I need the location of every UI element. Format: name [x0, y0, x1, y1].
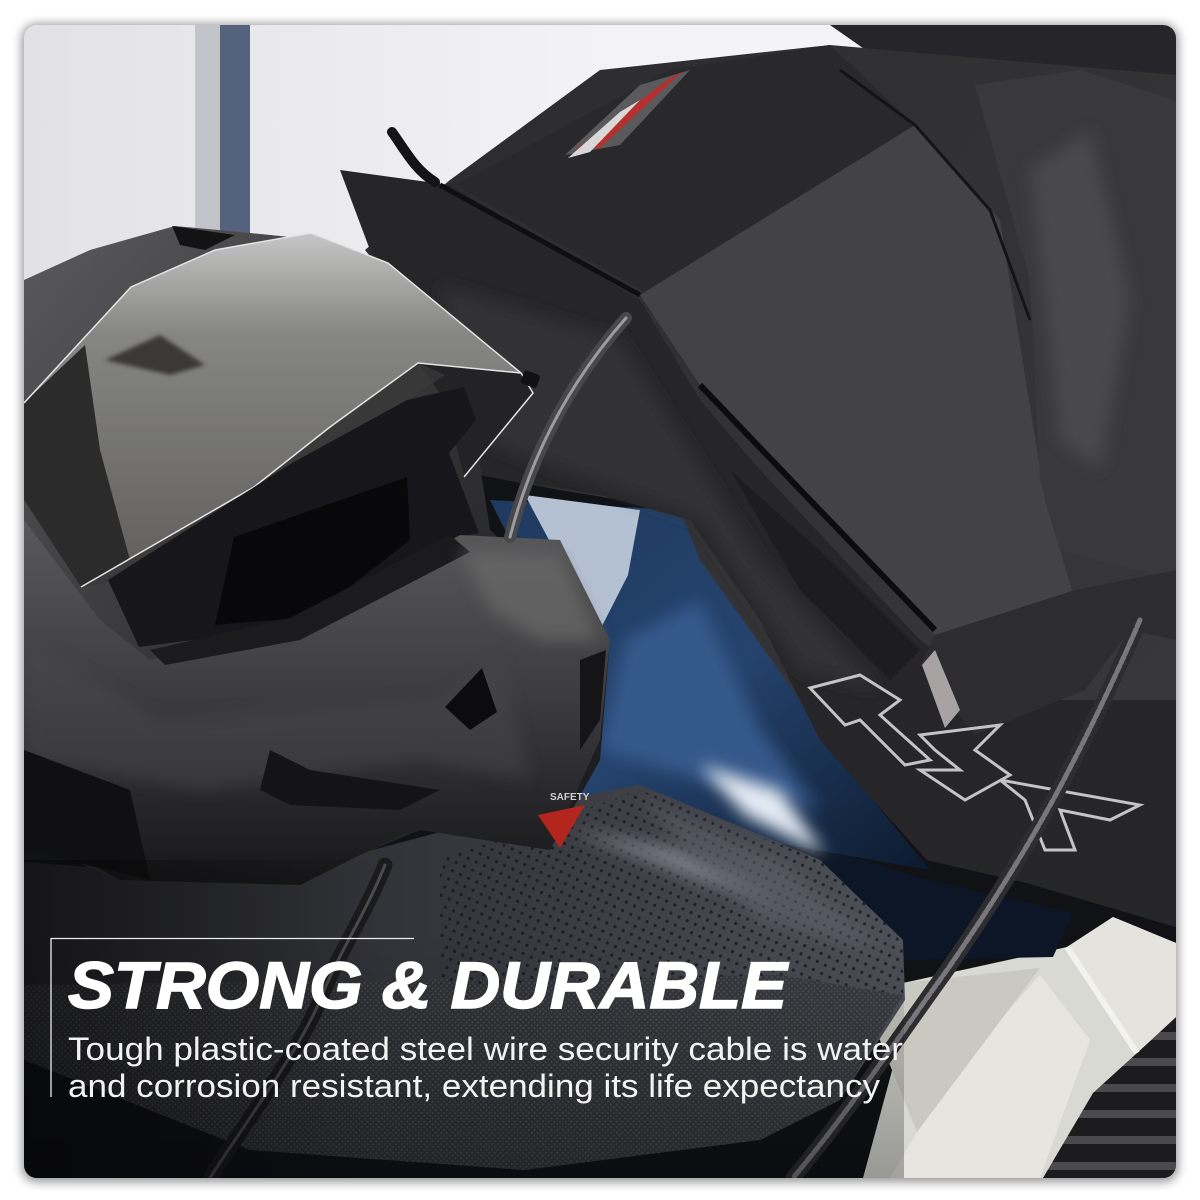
jacket collar flap	[824, 45, 896, 108]
jacket right sleeve	[1040, 469, 1044, 491]
handlebar at top right	[830, 25, 1176, 75]
helmet chin bar	[24, 520, 610, 885]
caption body text	[68, 1031, 903, 1104]
RST reflective logo	[810, 675, 1140, 850]
zip line	[700, 385, 935, 630]
dark blue lower tank trim	[782, 844, 1073, 960]
jacket cuff	[930, 570, 1176, 700]
visor interior	[24, 233, 521, 587]
jacket strap	[392, 132, 435, 182]
left dark gradient	[24, 860, 384, 1180]
safety badge	[538, 792, 590, 848]
caption heading: STRONG & DURABLE	[68, 948, 789, 1022]
cuff reflective tab	[922, 650, 960, 728]
safety badge: SAFETY	[550, 792, 590, 803]
caption frame line	[51, 938, 414, 1097]
helmet top vent	[172, 226, 235, 250]
visor rim band	[129, 364, 444, 560]
lower shell shadow	[24, 750, 146, 867]
visor dark lower left	[24, 345, 130, 587]
helmet inner lining	[108, 387, 479, 647]
RST red logo top	[565, 70, 690, 158]
white fairing	[863, 917, 1176, 1178]
lining inner hole	[215, 477, 410, 625]
motorcycle seat	[24, 785, 905, 1170]
jacket mass	[340, 45, 1176, 927]
jacket main panel	[640, 125, 1075, 635]
steel security cable	[210, 318, 1140, 1178]
caption line 1: Tough plastic-coated steel wire security cable is water	[68, 1031, 903, 1067]
jacket sleeve left	[340, 170, 1176, 927]
visor pivot knob	[521, 370, 540, 388]
dark base under the bike	[24, 470, 1176, 1180]
helmet	[24, 226, 610, 885]
engine fins	[1043, 1018, 1176, 1178]
caption line 2: and corrosion resistant, extending its life expectancy	[68, 1068, 880, 1104]
visor reflection smudge	[105, 335, 205, 375]
pole	[195, 25, 250, 250]
chin vent	[445, 668, 497, 730]
helmet shell	[24, 226, 610, 880]
blue fuel tank	[490, 495, 930, 870]
lower vents	[260, 750, 440, 810]
chin highlight	[460, 550, 600, 640]
visor right tip over jacket	[418, 363, 533, 477]
bottom dark gradient	[24, 1002, 904, 1178]
